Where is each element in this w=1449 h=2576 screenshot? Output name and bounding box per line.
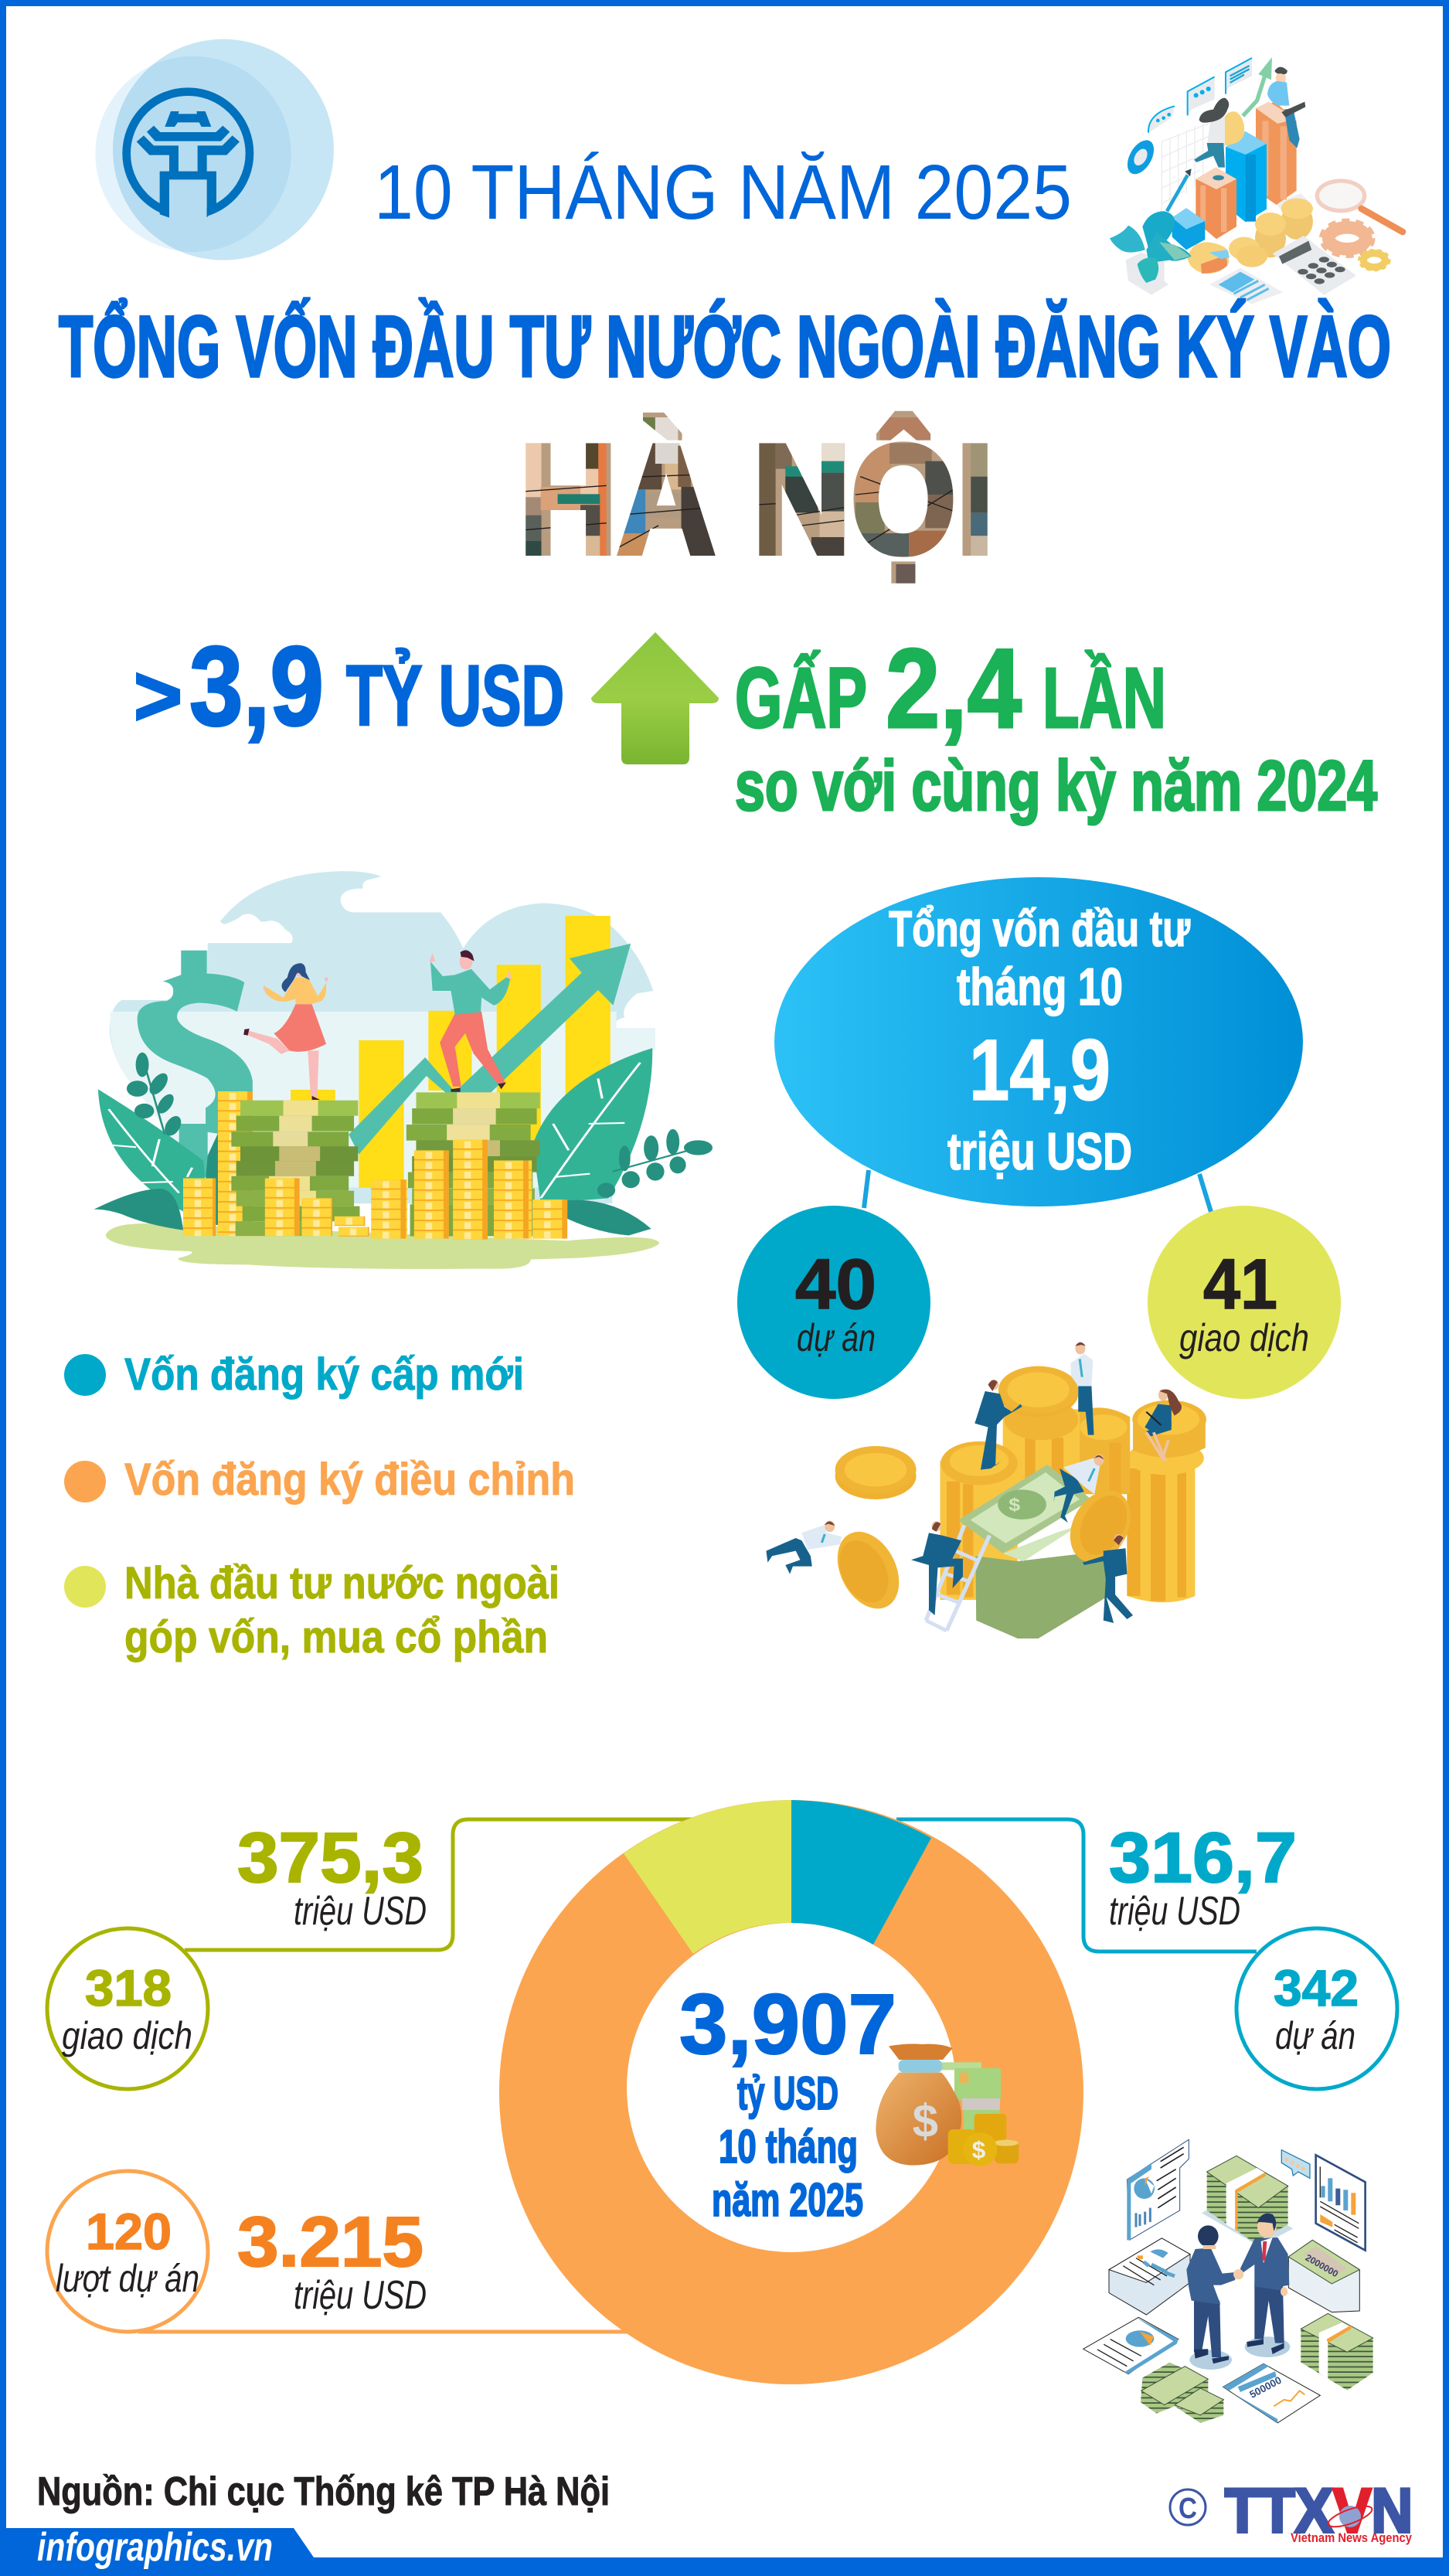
illustration: people on money stacks (94, 871, 713, 1269)
stat: 375.3 million USD: triệu USD (294, 1889, 427, 1934)
legend item: foreign investors buying shares: Nhà đầu tư nước ngoài (124, 1558, 560, 1608)
legend item: adjusted capital: Vốn đăng ký điều chỉnh (124, 1455, 575, 1505)
arrow up (591, 632, 719, 764)
callout: October total capital: triệu USD (947, 1122, 1132, 1181)
key figure: total capital (134, 623, 564, 749)
icon: business growth illustration (1110, 57, 1403, 304)
heading: period: 10 THÁNG NĂM 2025 (374, 149, 1072, 236)
key figure: growth: 2,4 (886, 625, 1022, 751)
callout line: foreign investors (185, 1819, 693, 1950)
donut center text: 3,907 (679, 1977, 896, 2072)
stat: 3,215 million USD: 3.215 (237, 2203, 423, 2282)
callout line: adjusted capital (138, 2329, 628, 2334)
donut center text: năm 2025 (712, 2174, 863, 2226)
key figure: total capital: 3,9 (189, 623, 324, 749)
logo: TTXVN: C (1179, 2493, 1197, 2525)
illustration: coins and money with business people: $ (1009, 1496, 1020, 1516)
donut chart (499, 1800, 1083, 2384)
stat: 316.7 million USD (1109, 1819, 1297, 1934)
legend item: foreign investors buying shares (64, 1558, 560, 1662)
icon: Hanoi logo (95, 39, 334, 260)
stat bubble: 40 projects: dự án (797, 1316, 876, 1359)
key figure: total capital: TỶ USD (346, 648, 564, 744)
stat: 3,215 million USD: triệu USD (294, 2273, 427, 2318)
donut center text (679, 1977, 896, 2226)
illustration: business handshake (1083, 2139, 1373, 2423)
callout: October total capital: 14,9 (969, 1022, 1111, 1118)
stat bubble: 342 projects: 342 (1274, 1959, 1359, 2016)
source: Nguồn: Chi cục Thống kê TP Hà Nội (37, 2469, 610, 2514)
stat bubble: 342 projects (1236, 1928, 1397, 2089)
stat bubble: 40 projects (737, 1206, 930, 1399)
key figure: growth (735, 625, 1377, 825)
stat: 375.3 million USD: 375,3 (237, 1819, 423, 1897)
logo: TTXVN: TTXVN (1225, 2476, 1413, 2546)
callout: October total capital (774, 877, 1303, 1206)
illustration: coins and money with business people (766, 1342, 1206, 1638)
icon: money bag: $ (972, 2136, 986, 2164)
stat bubble: 318 transactions: 318 (85, 1959, 172, 2016)
stat bubble: 41 transactions (1148, 1206, 1341, 1399)
callout: October total capital: Tổng vốn đầu tư (889, 900, 1191, 957)
key figure: total capital: > (134, 648, 182, 744)
key figure: growth: LẦN (1043, 651, 1166, 746)
logo: TTXVN: Vietnam News Agency (1291, 2530, 1412, 2545)
stat: 316.7 million USD: triệu USD (1109, 1889, 1240, 1934)
icon: money bag (876, 2044, 1019, 2166)
stat bubble: 318 transactions: giao dịch (62, 2014, 192, 2057)
donut center text: tỷ USD (737, 2067, 838, 2119)
key figure: growth: GẤP (735, 651, 867, 746)
callout: October total capital: tháng 10 (957, 958, 1123, 1016)
connector lines (864, 1170, 1211, 1212)
legend (64, 1349, 575, 1662)
stat: 316.7 million USD: 316,7 (1109, 1819, 1297, 1897)
footer band (0, 2525, 1449, 2576)
stat bubble: 40 projects: 40 (795, 1245, 876, 1324)
legend item: new registered capital: Vốn đăng ký cấp mới (124, 1349, 524, 1400)
stat bubble: 318 transactions (47, 1928, 208, 2089)
heading: Ha Noi with photo texture: HÀ NỘI (519, 413, 994, 586)
stat: 3,215 million USD (237, 2203, 427, 2318)
stat: 375.3 million USD (237, 1819, 427, 1934)
legend item: foreign investors buying shares: góp vốn, mua cổ phần (124, 1612, 548, 1662)
stat bubble: 120 projects: lượt dự án (56, 2257, 199, 2300)
stat bubble: 120 projects (47, 2171, 208, 2332)
illustration: business handshake: 500000 (1247, 2374, 1284, 2401)
stat bubble: 342 projects: dự án (1275, 2014, 1355, 2057)
icon: money bag: $ (913, 2095, 938, 2147)
illustration: business handshake: 2000000 (1304, 2252, 1340, 2279)
donut center text: 10 tháng (719, 2121, 858, 2173)
stat bubble: 41 transactions: giao dịch (1179, 1316, 1309, 1359)
stat bubble: 120 projects: 120 (86, 2203, 172, 2260)
stat bubble: 41 transactions: 41 (1203, 1245, 1277, 1324)
footer band: infographics.vn (37, 2525, 273, 2570)
callout line: new capital (896, 1819, 1257, 1952)
